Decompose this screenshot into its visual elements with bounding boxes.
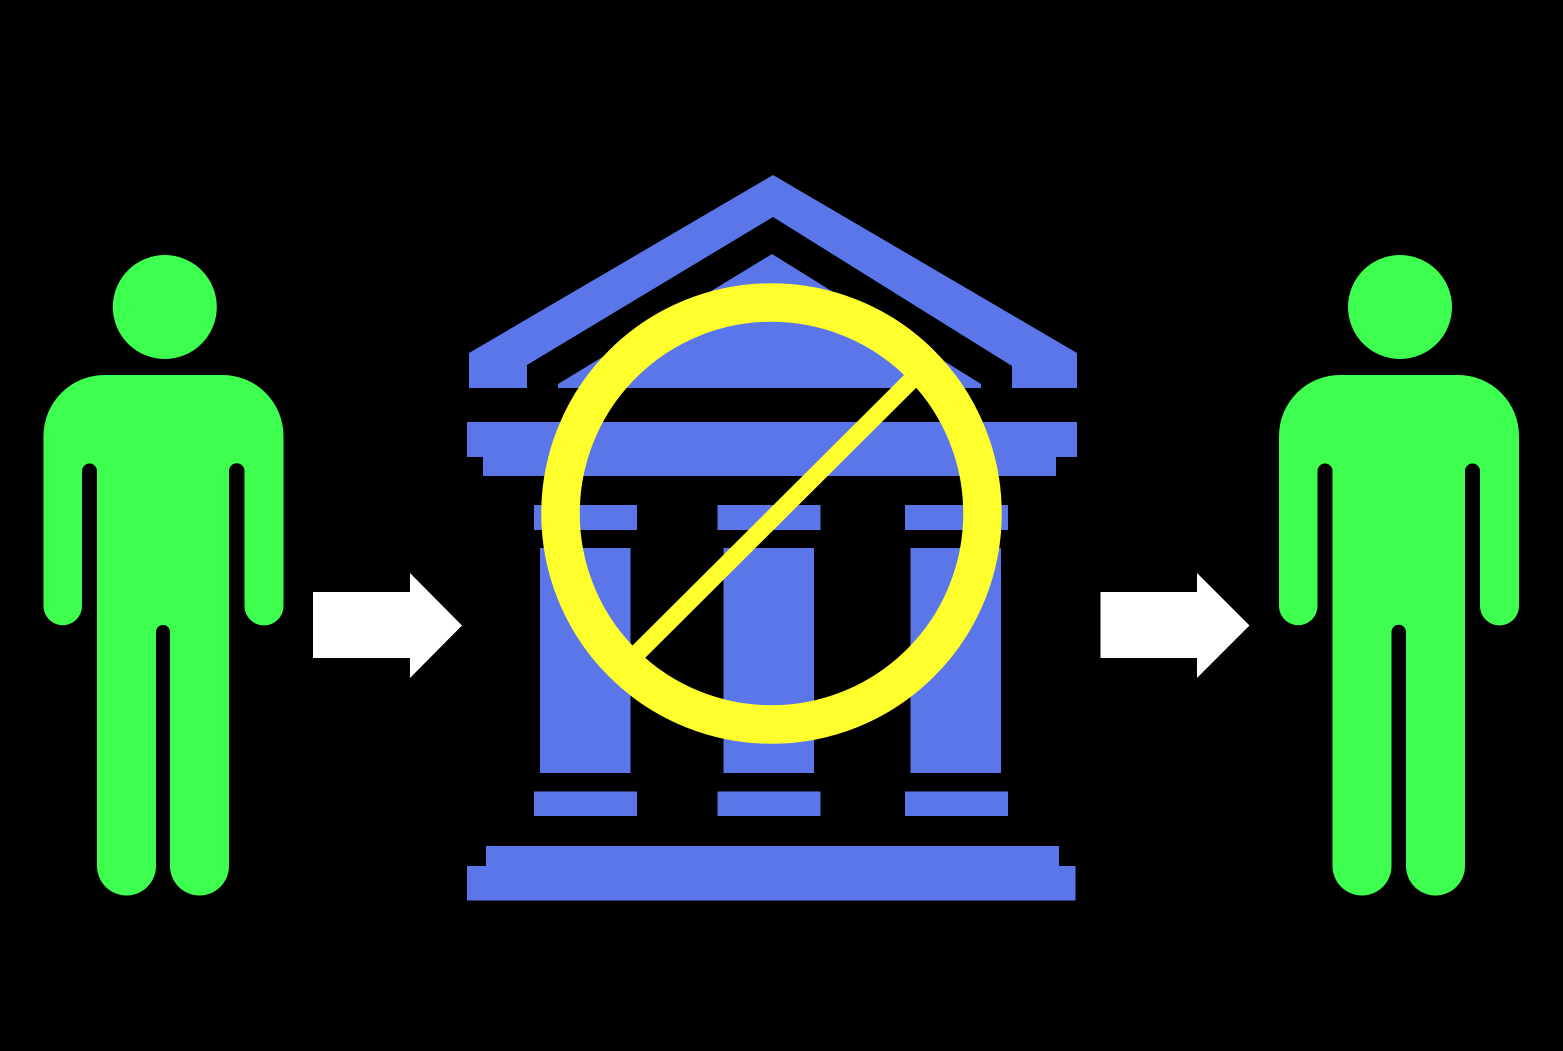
icon: prohibition sign [560,302,982,724]
arrow: right [1100,573,1250,678]
column shafts [540,548,1001,773]
arrow: left [313,573,462,678]
icon: bank building [467,175,1077,900]
icon: right person [1279,255,1519,896]
pediment [558,254,981,388]
column capitals [534,505,1008,530]
icon: left person [44,255,284,896]
roof [469,175,1077,388]
entablature [467,422,1077,476]
column bases [534,792,1008,816]
foundation [467,846,1076,900]
